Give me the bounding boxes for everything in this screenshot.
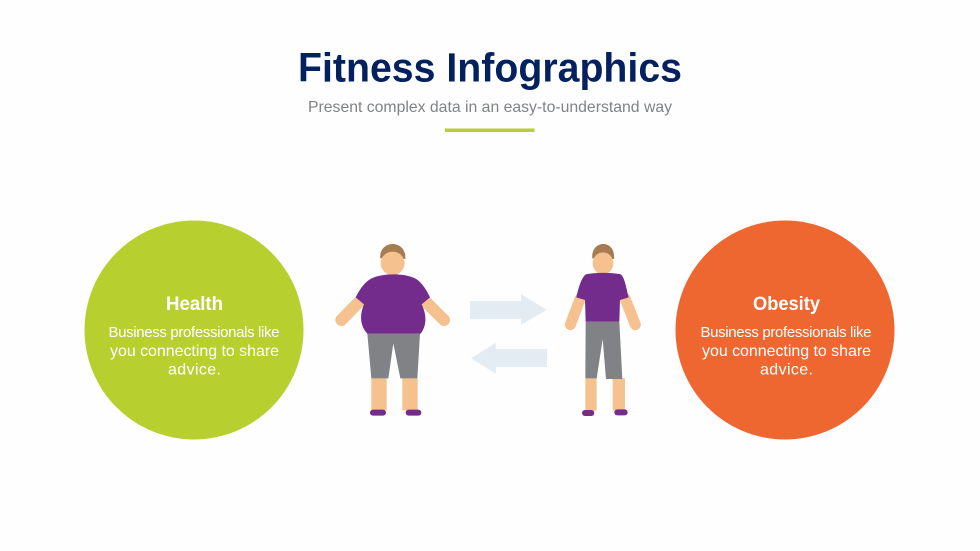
obesity body text: you connecting to share [702, 343, 871, 360]
title: Fitness Infographics [298, 44, 682, 90]
health body text: advice. [168, 362, 221, 378]
health body text [108, 324, 280, 378]
obesity body text: advice. [760, 362, 813, 378]
panel: health [84, 220, 304, 440]
health body text: Business professionals like [108, 324, 280, 341]
obesity heading: Obesity [753, 294, 820, 315]
obesity body text: Business professionals like [700, 324, 872, 341]
icon: slim person [570, 244, 635, 416]
health circle [84, 220, 304, 440]
health body text: you connecting to share [110, 343, 279, 360]
panel: obesity [676, 220, 894, 440]
health heading: Health [166, 294, 223, 315]
title underline [445, 128, 534, 132]
arrow: pointing left [471, 343, 547, 374]
subtitle: Present complex data in an easy-to-understand way [308, 99, 672, 116]
obesity body text [700, 324, 872, 378]
icon: overweight person [341, 244, 444, 416]
arrow: pointing right [470, 294, 547, 325]
obesity circle [676, 220, 894, 440]
